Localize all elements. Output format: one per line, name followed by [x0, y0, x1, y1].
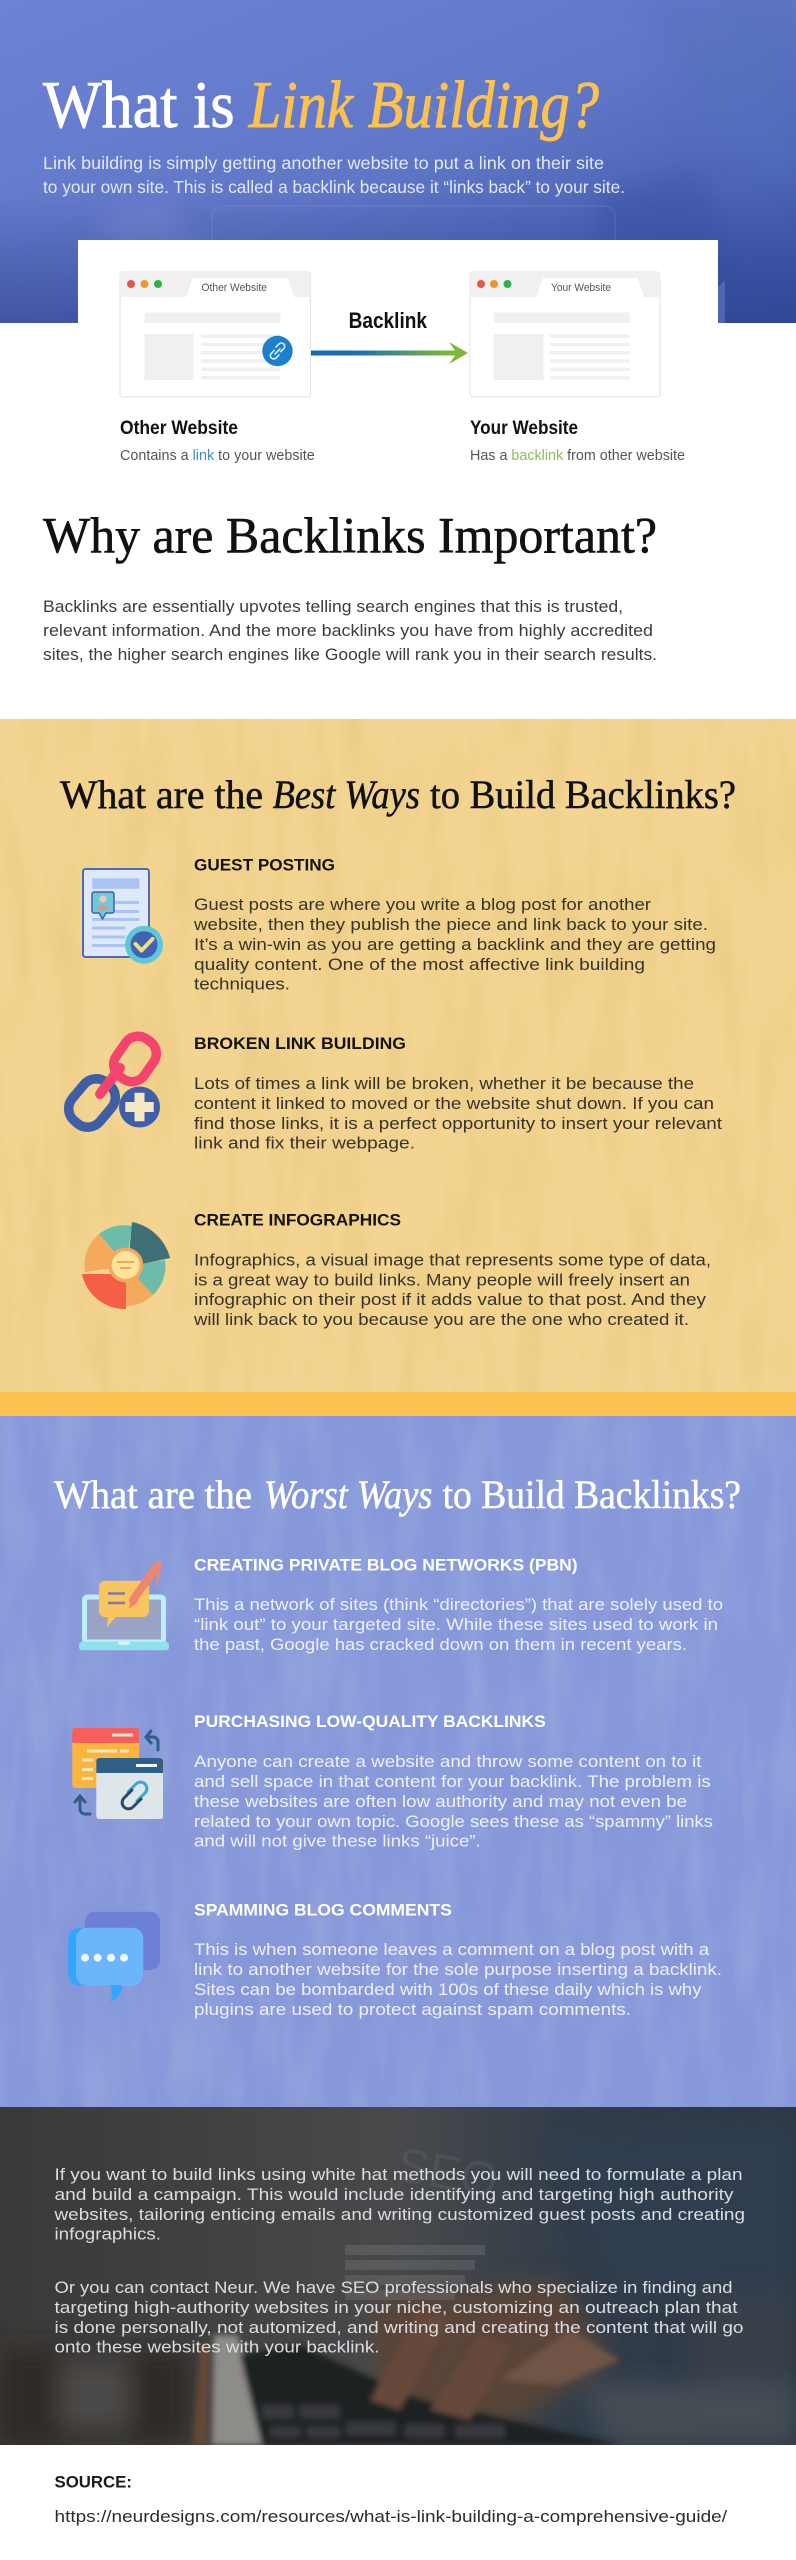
item: private blog networks: This a network of sites (think “directories”) that are solely used to: [194, 1596, 723, 1614]
item: low quality backlinks: PURCHASING LOW-QUALITY BACKLINKS: [194, 1712, 546, 1731]
item: low quality backlinks: related to your own topic. Google sees these as “spammy” links: [194, 1813, 713, 1831]
heading: best ways: [60, 772, 736, 817]
heading: worst ways: [54, 1472, 741, 1517]
caption: other website: Contains a link to your website: [120, 447, 315, 464]
text: why backlinks: [43, 597, 657, 664]
item: broken link building: link and fix their webpage.: [194, 1134, 415, 1152]
heading: why backlinks: Why are Backlinks Important?: [43, 509, 657, 565]
item: create infographics: infographic on their post if it adds value to that post. And they: [194, 1291, 707, 1309]
item: create infographics: will link back to you because you are the one who created it.: [193, 1311, 689, 1329]
browser window: other website: [120, 272, 310, 397]
item: guest posting: techniques.: [194, 976, 290, 994]
item: spamming blog comments: [194, 1901, 722, 2019]
closing text: websites, tailoring enticing emails and writing customized guest posts and creating: [53, 2206, 745, 2224]
hero intro text: [43, 153, 625, 197]
item: broken link building: BROKEN LINK BUILDING: [194, 1034, 406, 1053]
closing text: infographics.: [54, 2226, 161, 2244]
closing text: If you want to build links using white hat methods you will need to formulate a plan: [54, 2166, 742, 2184]
panel: best ways: [0, 719, 796, 1392]
item: private blog networks: “link out” to your targeted site. While these sites used to work in: [194, 1616, 718, 1634]
item: broken link building: [194, 1034, 722, 1152]
text: why backlinks: sites, the higher search engines like Google will rank you in their search results.: [43, 645, 657, 664]
item: broken link building: content it linked to moved or the website shut down. If you can: [194, 1095, 714, 1113]
item: create infographics: [193, 1211, 711, 1329]
closing text: Or you can contact Neur. We have SEO professionals who specialize in finding and: [54, 2279, 732, 2297]
icon: guest post document: [83, 869, 163, 964]
caption: other website: [120, 418, 315, 464]
item: low quality backlinks: Anyone can create a website and throw some content on to it: [194, 1753, 702, 1771]
item: private blog networks: CREATING PRIVATE BLOG NETWORKS (PBN): [194, 1556, 578, 1575]
item: private blog networks: [194, 1556, 723, 1654]
panel: hero background: [0, 0, 796, 355]
divider band: [0, 1392, 796, 1416]
browser window: other website: Other Website: [202, 282, 267, 294]
arrow: backlink: [311, 342, 468, 364]
caption: other website: Other Website: [120, 418, 238, 439]
title: Link Building?: [248, 68, 599, 142]
icon: pie chart: [82, 1222, 170, 1309]
icon: two linked web pages: [72, 1728, 163, 1819]
icon: broken chain with plus: [62, 1030, 162, 1134]
item: private blog networks: the past, Google has cracked down on them in recent years.: [194, 1636, 687, 1654]
hero intro text: to your own site. This is called a backlink because it “links back” to your site.: [43, 177, 625, 197]
text: why backlinks: relevant information. And the more backlinks you have from highly accredited: [43, 621, 653, 640]
item: low quality backlinks: these websites are often low authority and may not even be: [194, 1793, 687, 1811]
source: SOURCE:: [54, 2472, 132, 2491]
item: spamming blog comments: link to another website for the sole purpose inserting a backlink.: [194, 1961, 722, 1979]
item: low quality backlinks: and will not give these links “juice”.: [194, 1833, 481, 1851]
heading: worst ways: What are the: [54, 1472, 252, 1517]
panel: closing photo background: SEO: [393, 2139, 502, 2208]
heading: worst ways: Worst Ways: [264, 1472, 432, 1517]
item: spamming blog comments: SPAMMING BLOG COMMENTS: [194, 1901, 452, 1920]
item: spamming blog comments: This is when someone leaves a comment on a blog post with a: [194, 1941, 710, 1959]
icon: link badge: [262, 336, 293, 366]
heading: worst ways: to Build Backlinks?: [443, 1472, 741, 1517]
item: create infographics: Infographics, a visual image that represents some type of data,: [194, 1252, 711, 1270]
item: guest posting: It’s a win-win as you are getting a backlink and they are getting: [194, 936, 716, 954]
item: spamming blog comments: Sites can be bombarded with 100s of these daily which is why: [194, 1981, 702, 1999]
backlink label: Backlink: [349, 308, 428, 333]
panel: worst ways: [0, 1416, 796, 2107]
title: What is: [43, 68, 234, 142]
title: [43, 68, 599, 142]
item: guest posting: Guest posts are where you write a blog post for another: [194, 896, 652, 914]
item: broken link building: Lots of times a link will be broken, whether it be because the: [194, 1075, 694, 1093]
panel: backlink diagram: [78, 240, 718, 480]
browser window: your website: Your Website: [551, 282, 611, 294]
hero intro text: Link building is simply getting another website to put a link on their site: [43, 153, 604, 173]
source: https://neurdesigns.com/resources/what-is-link-building-a-comprehensive-guide/: [54, 2507, 727, 2526]
item: broken link building: find those links, it is a perfect opportunity to insert your relevant: [194, 1115, 722, 1133]
heading: best ways: What are the: [60, 772, 263, 817]
item: guest posting: [193, 856, 716, 994]
item: guest posting: quality content. One of the most affective link building: [194, 956, 645, 974]
item: low quality backlinks: [194, 1712, 713, 1851]
icon: laptop with speech bubble: [79, 1565, 169, 1650]
caption: your website: Has a backlink from other website: [470, 447, 685, 464]
closing text: targeting high-authority websites in your niche, customizing an outreach plan that: [54, 2299, 738, 2317]
caption: your website: [470, 418, 685, 464]
item: create infographics: is a great way to build links. Many people will freely insert an: [194, 1271, 690, 1289]
panel: closing photo background: [0, 2107, 796, 2445]
item: guest posting: website, then they publish the piece and link back to your site.: [193, 916, 708, 934]
item: create infographics: CREATE INFOGRAPHICS: [194, 1211, 401, 1230]
caption: your website: Your Website: [470, 418, 578, 439]
heading: best ways: Best Ways: [273, 772, 420, 817]
text: why backlinks: Backlinks are essentially upvotes telling search engines that this is trusted,: [43, 597, 623, 616]
closing text: onto these websites with your backlink.: [54, 2339, 380, 2357]
closing text: is done personally, not automized, and writing and creating the content that will go: [54, 2319, 744, 2337]
item: low quality backlinks: and sell space in that content for your backlink. The problem is: [194, 1773, 711, 1791]
browser window: your website: [470, 272, 660, 397]
item: guest posting: GUEST POSTING: [194, 856, 335, 875]
item: spamming blog comments: plugins are used to protect against spam comments.: [194, 2001, 631, 2019]
closing text: and build a campaign. This would include identifying and targeting high authority: [54, 2186, 734, 2204]
closing text: [53, 2166, 745, 2357]
heading: best ways: to Build Backlinks?: [430, 772, 736, 817]
source: [54, 2472, 727, 2526]
icon: chat bubbles: [68, 1912, 160, 2002]
